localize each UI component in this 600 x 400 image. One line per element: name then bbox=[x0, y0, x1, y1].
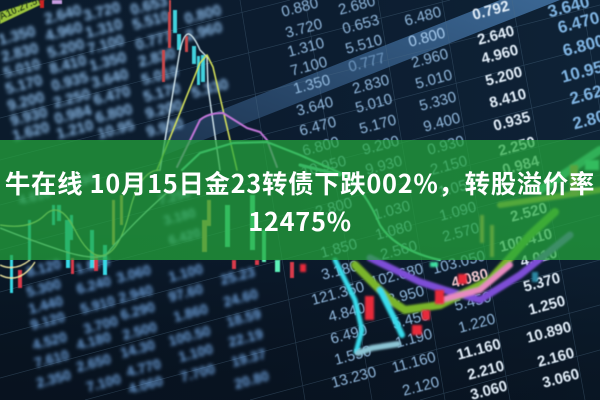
sharp number columns on the right: 3.950 bbox=[386, 283, 426, 309]
blurred number columns at bottom left: 2.500 bbox=[121, 318, 159, 343]
highlighted table row bbox=[165, 0, 560, 155]
sharp number columns on the right: 0.800 bbox=[407, 25, 447, 51]
sharp number columns on the right: 0.653 bbox=[341, 12, 381, 38]
sharp number columns on the right: 1.850 bbox=[319, 236, 359, 262]
blurred number columns at bottom left: 1.100 bbox=[167, 260, 205, 285]
sharp number columns on the right: 2.250 bbox=[497, 134, 537, 160]
sharp number columns on the right: 3.720 bbox=[284, 16, 324, 42]
sharp number columns on the right: 4.960 bbox=[480, 42, 520, 68]
blurred number columns on the left: 6.420 bbox=[167, 225, 202, 248]
sharp number columns on the right: 5.200 bbox=[484, 64, 524, 90]
blurred number columns on the left: 1.350 bbox=[88, 49, 128, 75]
sharp number columns on the right: 5.510 bbox=[344, 32, 384, 58]
sharp number columns on the right: 0.930 bbox=[426, 133, 466, 159]
blurred number columns at bottom left: 2.650 bbox=[75, 350, 113, 375]
blurred number columns on the left: 5.170 bbox=[4, 72, 44, 98]
blurred number columns at bottom left: 20.80 bbox=[233, 367, 271, 392]
blurred number columns on the left: 5.510 bbox=[131, 8, 171, 34]
blurred number columns on the left: 3.640 bbox=[90, 66, 130, 92]
blurred number columns at bottom left: 3.700 bbox=[82, 312, 120, 337]
blurred number columns at bottom left: 97.60 bbox=[167, 280, 205, 305]
lower left candlesticks and lines bbox=[0, 170, 294, 293]
blurred number columns on the left: 7.250 bbox=[157, 185, 192, 208]
title bbox=[5, 164, 595, 238]
blurred number columns at bottom left: 25.23 bbox=[219, 263, 257, 288]
sharp number columns on the right: 1.310 bbox=[286, 35, 326, 61]
sharp number columns on the right: 1.550 bbox=[333, 343, 373, 369]
sharp number columns on the right: 5.170 bbox=[358, 112, 398, 138]
sharp number columns on the right: 2.210 bbox=[466, 358, 506, 384]
upper candlesticks bbox=[162, 0, 205, 85]
blurred number columns on the left: 5.330 bbox=[190, 76, 230, 102]
blurred number columns on the left: 9.930 bbox=[145, 115, 185, 141]
sharp number columns on the right: 100.410 bbox=[497, 225, 554, 256]
sharp number columns on the right: 1.050 bbox=[437, 175, 477, 201]
blurred number columns on the left: 4.960 bbox=[44, 19, 84, 45]
sharp number columns on the right: 1.220 bbox=[457, 311, 497, 337]
blurred number columns at bottom left: 1.100 bbox=[177, 340, 215, 365]
sharp number columns on the right: 2.960 bbox=[410, 46, 450, 72]
sharp number columns on the right: 1.090 bbox=[438, 199, 478, 225]
sharp number columns on the right: 2.150 bbox=[429, 153, 469, 179]
blurred number columns at bottom left: 14.30 bbox=[119, 336, 157, 361]
translucent green title band bbox=[0, 140, 600, 260]
blurred number columns on the left: 9.200 bbox=[6, 89, 46, 115]
sharp number columns on the right: 2.830 bbox=[351, 72, 391, 98]
sharp number columns on the right: 1.190 bbox=[394, 326, 434, 352]
moving average lines over the upper chart bbox=[157, 34, 440, 260]
sharp number columns on the right: 6.470 bbox=[298, 114, 338, 140]
sharp number columns on the right: 3.060 bbox=[541, 366, 581, 392]
blurred number columns at bottom left: 7.100 bbox=[85, 370, 123, 395]
sharp number columns on the right: 8.410 bbox=[488, 86, 528, 112]
sharp number columns on the right: 1.350 bbox=[292, 72, 332, 98]
sharp number columns on the right: 1.080 bbox=[374, 218, 414, 244]
blurred number columns on the left: 2.830 bbox=[137, 45, 177, 71]
sharp number columns on the right: 11.160 bbox=[390, 349, 438, 377]
sharp number columns on the right: 0.777 bbox=[347, 50, 387, 76]
blurred number columns at bottom left: 4.060 bbox=[127, 372, 165, 397]
sharp number columns on the right: 9.200 bbox=[361, 133, 401, 159]
sharp number columns on the right: 121.350 bbox=[309, 278, 366, 309]
blurred number columns at bottom left: 6.240 bbox=[75, 272, 113, 297]
sharp number columns on the right: 9.400 bbox=[422, 110, 462, 136]
sharp number columns on the right: 9.930 bbox=[364, 153, 404, 179]
blurred number columns on the left: 9.200 bbox=[144, 97, 184, 123]
blurred number columns at bottom left: 100.50 bbox=[167, 322, 212, 349]
lower right coloured trend bands and candles bbox=[335, 150, 600, 353]
blurred number columns on the left: 4.610 bbox=[17, 185, 52, 208]
title: 牛在线 10月15日金23转债下跌002%，转股溢价率 bbox=[5, 164, 595, 200]
blurred number columns on the left: 10.95 bbox=[96, 117, 136, 143]
blurred number columns at bottom left: 7.700 bbox=[179, 360, 217, 385]
blurred number columns on the left: 6.470 bbox=[92, 83, 132, 109]
sharp number columns on the right: 5.450 bbox=[453, 289, 493, 315]
blurred number columns on the left: 0.800 bbox=[183, 2, 223, 28]
blurred number columns at bottom left: 7.610 bbox=[33, 346, 71, 371]
sharp number columns on the right: 5.330 bbox=[418, 89, 458, 115]
blurred number columns on the left: 2.250 bbox=[52, 86, 92, 112]
sharp number columns on the right: 5.370 bbox=[522, 270, 562, 296]
blurred number columns on the left: 5.170 bbox=[142, 80, 182, 106]
blurred number columns at bottom left: 1.870 bbox=[74, 252, 112, 277]
sharp number columns on the right: 1.250 bbox=[527, 293, 567, 319]
sharp number columns on the right: 6.490 bbox=[329, 322, 369, 348]
blurred number columns on the left: 3.180 bbox=[162, 205, 197, 228]
blurred number columns on the left: 5.200 bbox=[46, 36, 86, 62]
blurred number columns at bottom left: 3.060 bbox=[115, 261, 153, 286]
blurred number columns on the left: 5.010 bbox=[2, 56, 42, 82]
blurred number columns on the left: 6.800 bbox=[94, 101, 134, 127]
sharp number columns on the right: 2.640 bbox=[476, 23, 516, 49]
blurred number columns at bottom left: 4.770 bbox=[125, 355, 163, 380]
sharp number columns on the right: 0.984 bbox=[501, 152, 542, 179]
blurred number columns on the left: 2.640 bbox=[43, 2, 83, 28]
blurred number columns on the left: 8.410 bbox=[48, 52, 88, 78]
sharp number columns on the right: 2.520 bbox=[509, 200, 549, 226]
blurred number columns on the left: 1.210 bbox=[55, 117, 95, 143]
blurred number columns at bottom left: 5.300 bbox=[25, 275, 63, 300]
blurred number columns at bottom left bbox=[25, 252, 271, 397]
blurred number columns on the left: 0.935 bbox=[50, 69, 90, 95]
sharp number columns on the right bbox=[280, 0, 600, 400]
blurred number columns on the left: 7.100 bbox=[86, 32, 126, 58]
sharp number columns on the right: 2.560 bbox=[379, 238, 419, 264]
sharp number columns on the right: 5.010 bbox=[354, 91, 394, 117]
sharp number columns on the right: 103.050 bbox=[430, 247, 487, 278]
blurred number columns on the left: 0.777 bbox=[134, 28, 174, 54]
blurred number columns on the left: 2.960 bbox=[184, 19, 224, 45]
sharp number columns on the right: 7.100 bbox=[289, 54, 329, 80]
sharp number columns on the right: 13.230 bbox=[329, 364, 378, 392]
blurred number columns at bottom left: 8.120 bbox=[25, 255, 63, 280]
sharp number columns on the right: 0.935 bbox=[492, 109, 532, 135]
blurred number columns at bottom left: 1.440 bbox=[27, 292, 65, 317]
sharp number columns on the right: 2.120 bbox=[401, 374, 441, 400]
sharp number columns on the right: 2.800 bbox=[314, 195, 354, 221]
blurred number columns at bottom left: 18.59 bbox=[225, 305, 263, 330]
blurred number columns on the left bbox=[0, 0, 230, 248]
sharp number columns on the right: 11.160 bbox=[455, 336, 503, 364]
sharp number columns on the right: 2.570 bbox=[441, 220, 481, 246]
blurred number columns on the left: 2.190 bbox=[62, 170, 97, 193]
blurred number columns at bottom left: 4.520 bbox=[31, 328, 69, 353]
blurred number columns at bottom left: 2.350 bbox=[35, 366, 73, 391]
blurred number columns on the left: 1.620 bbox=[11, 119, 51, 145]
blurred number columns at bottom left: 24.60 bbox=[222, 285, 260, 310]
blurred number columns at bottom left: 9.120 bbox=[29, 308, 67, 333]
sharp number columns on the right: 10.950 bbox=[299, 153, 348, 181]
sharp number columns on the right: 3.640 bbox=[295, 94, 335, 120]
blurred number columns on the left: 0.984 bbox=[53, 102, 94, 128]
sharp number columns on the right: 5.010 bbox=[414, 67, 454, 93]
blurred number columns at bottom left: 4.180 bbox=[75, 328, 113, 353]
sharp number columns on the right: 4.080 bbox=[450, 266, 490, 292]
blurred number columns at bottom left: 22.19 bbox=[227, 325, 265, 350]
blurred number columns on the left: 1.310 bbox=[84, 16, 124, 42]
blurred number columns at bottom left: 2.940 bbox=[117, 281, 155, 306]
sharp number columns on the right: 4.840 bbox=[327, 300, 367, 326]
sharp number columns on the right: 4.010 bbox=[519, 245, 559, 271]
blurred number columns at bottom left: 1.860 bbox=[172, 300, 210, 325]
blurred number columns at bottom left: 5.910 bbox=[79, 292, 117, 317]
sharp number columns on the right: 3.180 bbox=[320, 258, 360, 284]
sharp number columns on the right: 102.680 bbox=[368, 260, 425, 291]
sharp number columns on the right: 6.480 bbox=[403, 4, 443, 30]
sharp number columns on the right: 10.890 bbox=[524, 319, 573, 347]
blurred number columns at bottom left: 19.37 bbox=[230, 345, 268, 370]
sharp number columns on the right: 6.800 bbox=[301, 134, 341, 160]
sharp number columns on the right: 5.450 bbox=[391, 307, 431, 333]
sharp number columns on the right: 1.030 bbox=[372, 198, 412, 224]
blurred number columns on the left: 2.830 bbox=[0, 40, 40, 66]
blurred number columns on the left: 9.930 bbox=[9, 104, 49, 130]
sharp number columns on the right: 2.160 bbox=[536, 345, 576, 371]
blurred number columns at bottom left: 6.290 bbox=[119, 298, 157, 323]
title: 12475% bbox=[248, 202, 352, 238]
blurred number columns on the left: 5.010 bbox=[140, 63, 180, 89]
right edge candles bbox=[430, 160, 599, 282]
